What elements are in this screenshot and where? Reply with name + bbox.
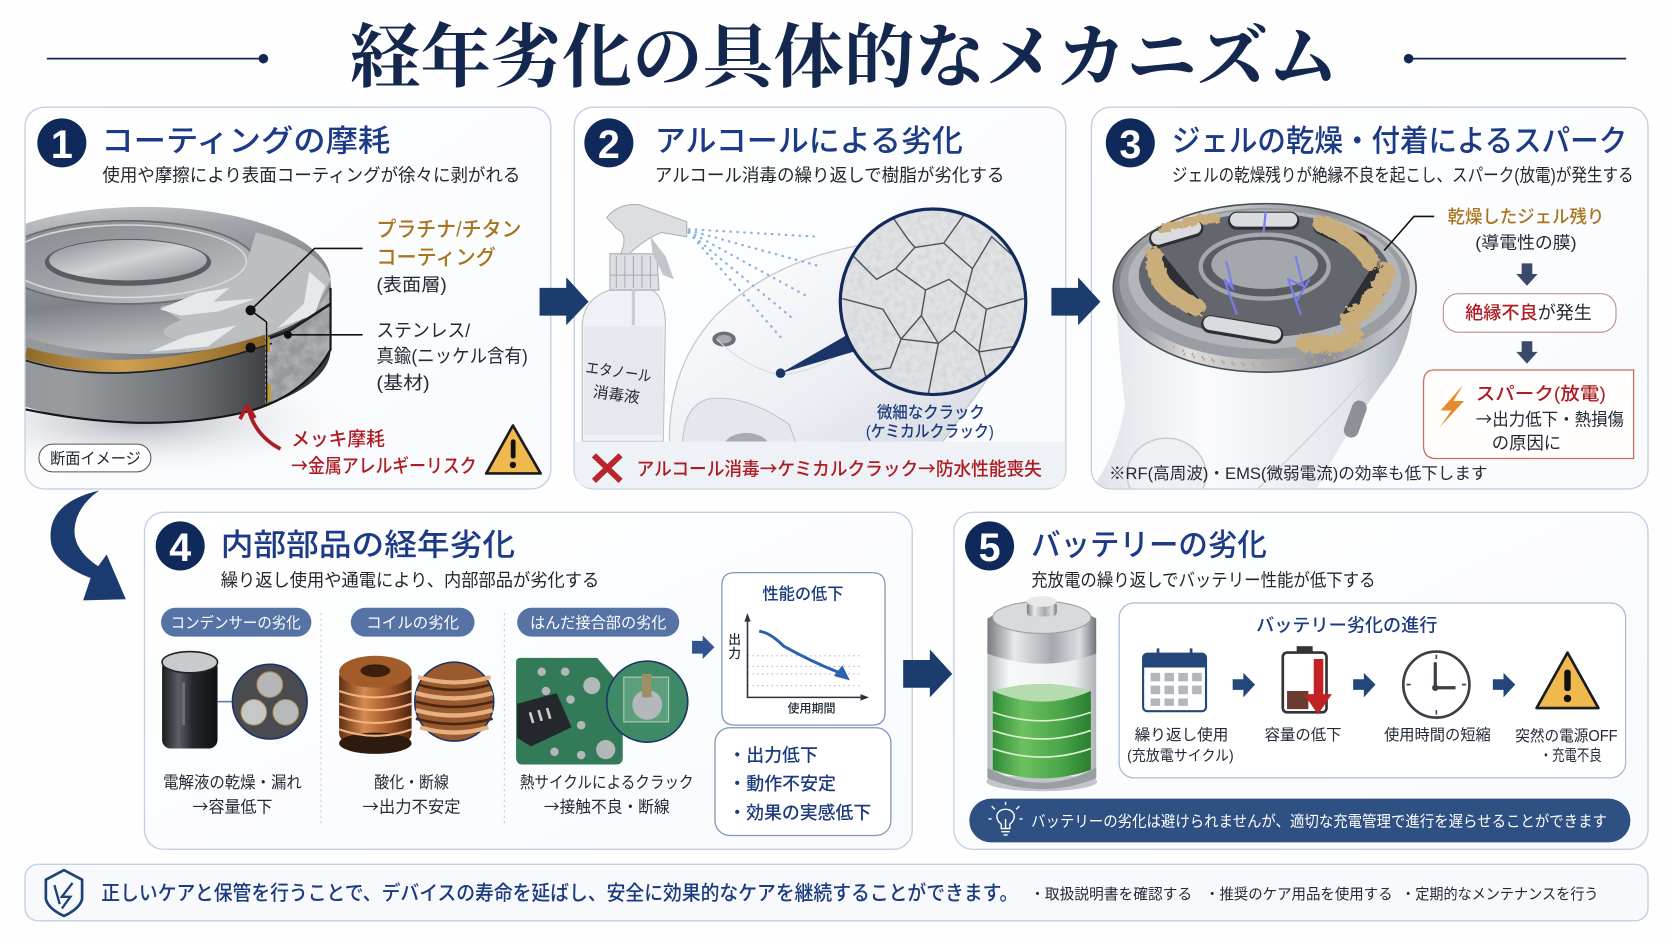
box: symptoms: ・効果の実感低下 — [728, 803, 871, 823]
icon: clock — [1403, 652, 1469, 718]
box: symptoms: ・動作不安定 — [728, 774, 836, 794]
label: dried gel: 乾燥したジェル残り — [1448, 206, 1604, 227]
result band — [575, 441, 1065, 488]
panel 5: battery — [25, 277, 1648, 921]
label: coating layer — [376, 219, 521, 295]
arrow: curved, row 1 to row 2 — [51, 491, 126, 600]
step labels: ・充電不良 — [1540, 746, 1602, 764]
number badge 5: 5 — [979, 526, 1001, 570]
label: micro cracks — [866, 403, 994, 441]
chart title: 性能の低下 — [762, 584, 843, 603]
subheading 1: 使用や摩擦により表面コーティングが徐々に剥がれる — [102, 165, 520, 185]
illustration: spray bottle — [582, 204, 687, 441]
box: spark — [1424, 370, 1634, 459]
label: dried gel — [1448, 206, 1604, 252]
pill: capacitor: コンデンサーの劣化 — [171, 613, 301, 632]
caption: solder — [520, 773, 694, 818]
step labels: 繰り返し使用 — [1135, 726, 1228, 744]
number badge 4 — [156, 521, 205, 570]
heading 4: 内部部品の経年劣化 — [221, 528, 515, 563]
icon: shield — [46, 870, 82, 916]
illustration: battery — [986, 596, 1097, 791]
icon: battery low — [1283, 646, 1332, 714]
illustration: capacitor — [162, 652, 307, 749]
warning text — [291, 429, 477, 478]
box: spark: の原因に — [1492, 433, 1561, 453]
badge: section image — [39, 444, 151, 472]
caption: coil: 酸化・断線 — [374, 773, 449, 792]
arrow down — [1516, 341, 1538, 364]
axis labels: 使用期間 — [787, 701, 835, 715]
label: coating layer: コーティング — [376, 246, 496, 269]
bottle label — [585, 359, 653, 407]
number badge 1: 1 — [51, 123, 73, 167]
number badge 3: 3 — [1119, 123, 1141, 167]
icon: red cross — [594, 455, 621, 481]
panel 3: gel spark — [1091, 107, 1648, 511]
badge: section image: 断面イメージ — [50, 450, 141, 468]
icon: warning — [1537, 653, 1598, 708]
footer tips: ・取扱説明書を確認する — [1030, 886, 1192, 903]
axis labels: 出 — [728, 632, 741, 647]
footer tips — [1030, 886, 1598, 903]
leader: gel residue — [1384, 216, 1434, 251]
axis labels — [728, 632, 835, 715]
result text: アルコール消毒→ケミカルクラック→防水性能喪失 — [637, 455, 1042, 482]
label: micro cracks: 微細なクラック — [877, 403, 985, 422]
box: progression — [1119, 603, 1626, 778]
icon: warning triangle — [486, 425, 541, 473]
pill: coil — [351, 608, 475, 637]
pill: capacitor — [161, 608, 311, 637]
footer tips: ・推奨のケア用品を使用する — [1205, 886, 1393, 903]
arrow: panel 2 to 3 — [1051, 277, 1100, 325]
subheading 2: アルコール消毒の繰り返しで樹脂が劣化する — [655, 165, 1004, 185]
marker dot — [776, 368, 785, 378]
illustration: coil — [339, 656, 494, 754]
axis labels: 力 — [728, 646, 741, 661]
label: base material: ステンレス/ — [376, 320, 471, 341]
label: coating layer: プラチナ/チタン — [376, 219, 521, 242]
box: spark: →出力低下・熱損傷 — [1476, 406, 1624, 431]
label: base material: 真鍮(ニッケル含有) — [376, 346, 528, 367]
spray mist — [689, 229, 821, 337]
number badge 1 — [37, 118, 86, 167]
step labels: (充放電サイクル) — [1127, 747, 1234, 764]
title: 経年劣化の具体的なメカニズム — [350, 19, 1338, 96]
magnifier connector — [781, 324, 866, 373]
small arrow — [692, 636, 714, 659]
caption: capacitor — [163, 773, 302, 818]
arrow: panel 1 to 2 — [540, 277, 589, 325]
panel 2: alcohol — [574, 107, 1066, 489]
illustration: facial device — [1092, 204, 1416, 511]
illustration: circuit board with solder joint — [516, 658, 688, 765]
warning text: →金属アレルギーリスク — [291, 450, 477, 478]
device details — [682, 332, 836, 442]
arrow — [1233, 673, 1255, 697]
panel 4: internal parts — [144, 512, 912, 849]
number badge 5 — [965, 521, 1014, 570]
arrow — [1353, 673, 1376, 697]
tip pill: バッテリーの劣化は避けられませんが、適切な充電管理で進行を遅らせることができます — [1031, 812, 1607, 830]
step labels: 突然の電源OFF — [1515, 727, 1618, 745]
arrow: wear point — [240, 405, 280, 449]
panel 1: coating wear — [0, 107, 551, 489]
footer banner — [25, 864, 1648, 921]
icon: light bulb — [988, 802, 1023, 835]
magnified cracks — [840, 209, 1026, 397]
caption: coil: →出力不安定 — [363, 794, 461, 818]
footnote: ※RF(高周波)・EMS(微弱電流)の効率も低下します — [1109, 464, 1488, 483]
subheading 4: 繰り返し使用や通電により、内部部品が劣化する — [221, 570, 599, 590]
step labels: 容量の低下 — [1265, 726, 1341, 744]
number badge 3 — [1106, 118, 1155, 167]
box: insulation failure — [1443, 294, 1616, 332]
illustration: coated disc cross-section — [26, 206, 332, 460]
number badge 2: 2 — [598, 123, 620, 167]
caption: capacitor: 電解液の乾燥・漏れ — [163, 773, 302, 792]
label: base material: (基材) — [376, 373, 430, 393]
box: spark: スパーク(放電) — [1476, 384, 1606, 404]
label: coating layer: (表面層) — [376, 275, 447, 295]
pill: solder — [517, 608, 679, 637]
step labels — [1127, 726, 1618, 764]
footer tips: ・定期的なメンテナンスを行う — [1401, 886, 1598, 903]
caption: solder: 熱サイクルによるクラック — [520, 773, 694, 792]
heading 5: バッテリーの劣化 — [1031, 528, 1267, 563]
tip pill — [969, 799, 1630, 842]
arrow down — [1516, 263, 1538, 286]
icon: lightning bolt — [1440, 385, 1464, 428]
icon: calendar — [1143, 648, 1206, 711]
chart: performance decline — [722, 573, 885, 725]
box: symptoms — [715, 728, 891, 835]
pill: solder: はんだ接合部の劣化 — [530, 614, 666, 632]
heading 2: アルコールによる劣化 — [655, 123, 963, 158]
pill: coil: コイルの劣化 — [366, 614, 459, 632]
subheading 5: 充放電の繰り返しでバッテリー性能が低下する — [1031, 570, 1376, 590]
footer message: 正しいケアと保管を行うことで、デバイスの寿命を延ばし、安全に効果的なケアを継続することができます。 — [101, 881, 1018, 905]
illustration: white device — [669, 243, 992, 448]
caption: capacitor: →容量低下 — [192, 794, 272, 818]
box: symptoms: ・出力低下 — [728, 745, 818, 765]
title rule right — [1404, 54, 1626, 63]
heading 1: コーティングの摩耗 — [101, 123, 390, 158]
callout leaders — [246, 248, 363, 403]
box: insulation failure: 絶縁不良が発生 — [1465, 303, 1592, 323]
number badge 4: 4 — [169, 526, 191, 570]
arrow: panel 4 to 5 — [903, 649, 952, 697]
heading 3: ジェルの乾燥・付着によるスパーク — [1172, 123, 1627, 158]
label: dried gel: (導電性の膜) — [1475, 233, 1577, 252]
warning text: メッキ摩耗 — [291, 429, 385, 451]
progression title: バッテリー劣化の進行 — [1256, 615, 1437, 635]
number badge 2 — [584, 118, 633, 167]
arrow — [1493, 673, 1515, 697]
caption: solder: →接触不良・断線 — [544, 794, 670, 818]
bottle label: エタノール — [585, 359, 653, 386]
step labels: 使用時間の短縮 — [1384, 726, 1491, 744]
label: base material — [376, 320, 528, 393]
caption: coil — [363, 773, 461, 818]
label: micro cracks: (ケミカルクラック) — [866, 422, 994, 441]
title rule left — [47, 54, 268, 63]
bottle label: 消毒液 — [592, 383, 641, 407]
